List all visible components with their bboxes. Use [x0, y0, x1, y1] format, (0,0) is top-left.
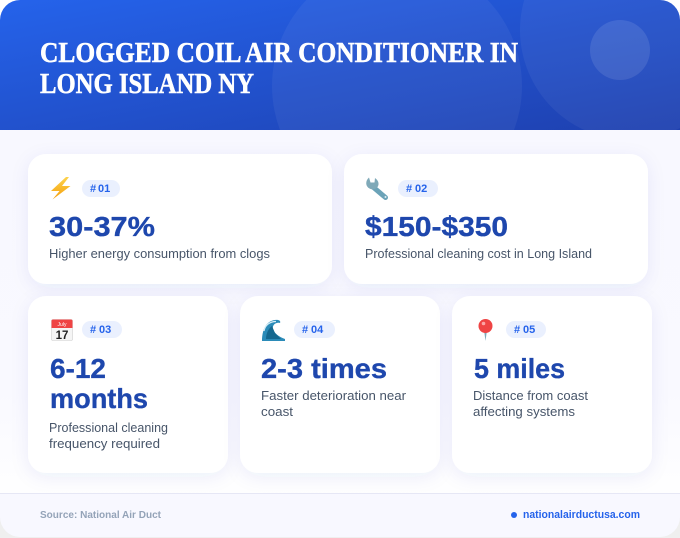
icon: calendar: 17 [56, 330, 68, 342]
badge 05: # [514, 324, 520, 336]
value: 6-12 months: months [50, 383, 148, 414]
badge 01 [82, 180, 120, 197]
source text: Source: National Air Duct [40, 509, 161, 521]
badge 02: # [406, 183, 412, 195]
label: distance from coast [473, 388, 588, 419]
icon: map pin [478, 319, 492, 341]
footer [0, 493, 680, 537]
label: cleaning frequency [49, 420, 168, 451]
panel: stat 05 distance from coast [452, 296, 652, 473]
label: deterioration near coast: Faster deterioration near [261, 388, 407, 403]
badge 05: 05 [523, 324, 535, 336]
badge 04: # [302, 324, 308, 336]
title: CLOGGED COIL AIR CONDITIONER IN [40, 38, 518, 69]
badge 03 [82, 321, 122, 338]
panel: stat 02 cleaning cost [344, 154, 648, 284]
badge 01: 01 [98, 183, 110, 195]
icon: lightning bolt [51, 177, 70, 200]
label: cleaning cost: Professional cleaning cost in Long Island [365, 246, 592, 261]
badge 05 [506, 321, 546, 338]
panel: stat 03 cleaning frequency [28, 296, 228, 473]
panel: stat 01 energy consumption [28, 154, 332, 284]
value: 5 miles: 5 miles [474, 353, 565, 384]
badge 03: # [90, 324, 96, 336]
badge 04: 04 [311, 324, 324, 336]
icon: wrench [366, 178, 386, 198]
label: cleaning frequency: Professional cleaning [49, 420, 168, 435]
badge 02: 02 [415, 183, 427, 195]
badge 03: 03 [99, 324, 111, 336]
value: 6-12 months [50, 353, 148, 414]
label: distance from coast: affecting systems [473, 404, 575, 419]
value: 30-37%: 30-37% [49, 211, 155, 242]
value: 2-3 times: 2-3 times [261, 353, 387, 384]
title [40, 38, 518, 100]
header banner [0, 0, 680, 130]
icon: calendar: July [58, 322, 67, 328]
label: deterioration near coast [261, 388, 407, 419]
website link with dot: nationalairductusa.com [523, 509, 640, 521]
badge 02 [398, 180, 438, 197]
icon: calendar [52, 320, 72, 342]
icon: wave [262, 320, 285, 341]
label: cleaning frequency: frequency required [49, 436, 160, 451]
badge 01: # [90, 183, 96, 195]
label: energy consumption: Higher energy consumption from clogs [49, 246, 270, 261]
panel: stat 04 deterioration [240, 296, 440, 473]
value: $150-$350: $150-$350 [365, 211, 508, 242]
label: distance from coast: Distance from coast [473, 388, 588, 403]
title: LONG ISLAND NY [40, 69, 254, 100]
label: deterioration near coast: coast [261, 404, 293, 419]
value: 6-12 months: 6-12 [50, 353, 106, 384]
badge 04 [294, 321, 335, 338]
